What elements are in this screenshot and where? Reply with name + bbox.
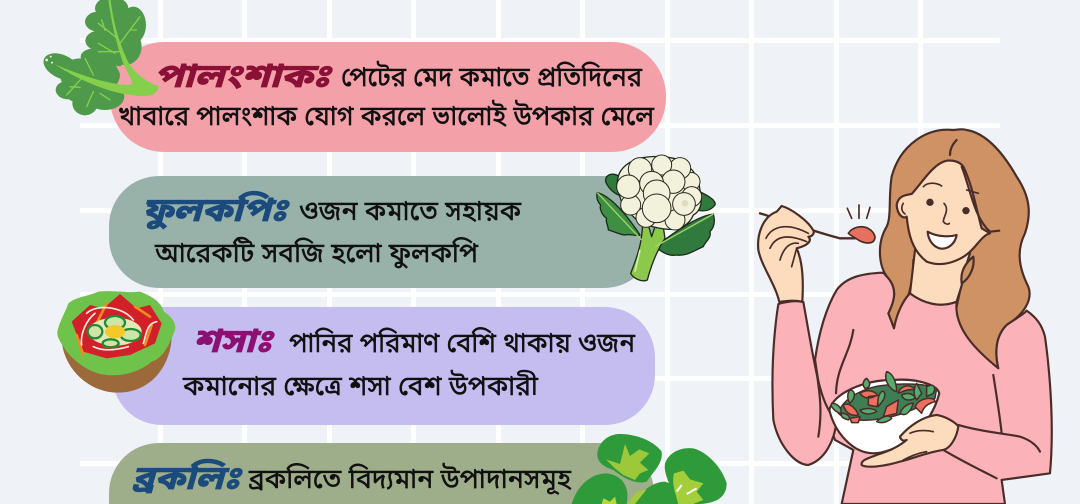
- text: spinach line 2: খাবারে পালংশাক যোগ করলে ভালোই উপকার মেলে: [118, 100, 654, 131]
- illustration part: neck: [910, 250, 970, 305]
- illustration part: eyes: [926, 199, 970, 214]
- heading: spinach: পালংশাকঃ: [154, 57, 333, 94]
- illustration part: fork: [760, 213, 855, 238]
- heading: cucumber: শসাঃ: [193, 322, 275, 359]
- icon: cauliflower: [597, 155, 715, 281]
- illustration: woman eating salad: [758, 129, 1052, 504]
- text: cucumber line 2: কমানোর ক্ষেত্রে শসা বেশ উপকারী: [182, 370, 539, 401]
- text: spinach line 1: পেটের মেদ কমাতে প্রতিদিনের: [341, 61, 643, 92]
- illustration part: lower hand and sleeve: [943, 425, 1040, 478]
- text: broccoli line 1: ব্রকলিতে বিদ্যমান উপাদানসমূহ: [248, 463, 572, 495]
- icon: spinach leaves: [39, 0, 158, 115]
- text: cauliflower line 2: আরেকটি সবজি হলো ফুলকপি: [154, 237, 479, 269]
- illustration part: food on fork: [848, 227, 875, 243]
- illustration part: salad bowl: [829, 380, 939, 453]
- panel: spinach: [110, 42, 666, 152]
- heading: cauliflower: ফুলকপিঃ: [142, 191, 290, 230]
- heading: broccoli: ব্রকলিঃ: [132, 459, 243, 496]
- panel: broccoli: [109, 443, 654, 504]
- illustration part: sweater body: [815, 273, 1052, 504]
- illustration part: face: [897, 161, 990, 264]
- text: cauliflower line 1: ওজন কমাতে সহায়ক: [299, 196, 522, 226]
- illustration part: mouth: [928, 232, 957, 249]
- illustration part: raised sleeve: [772, 301, 837, 465]
- panel: cucumber: [112, 307, 655, 425]
- illustration part: raised hand: [758, 206, 814, 302]
- panel: cauliflower: [109, 176, 654, 288]
- illustration part: salad: [831, 372, 937, 423]
- text: cucumber line 1: পানির পরিমাণ বেশি থাকায় ওজন: [289, 327, 636, 358]
- icon: salad bowl: [57, 291, 175, 393]
- icon: broccoli: [572, 434, 727, 504]
- illustration part: back hair: [880, 129, 1030, 368]
